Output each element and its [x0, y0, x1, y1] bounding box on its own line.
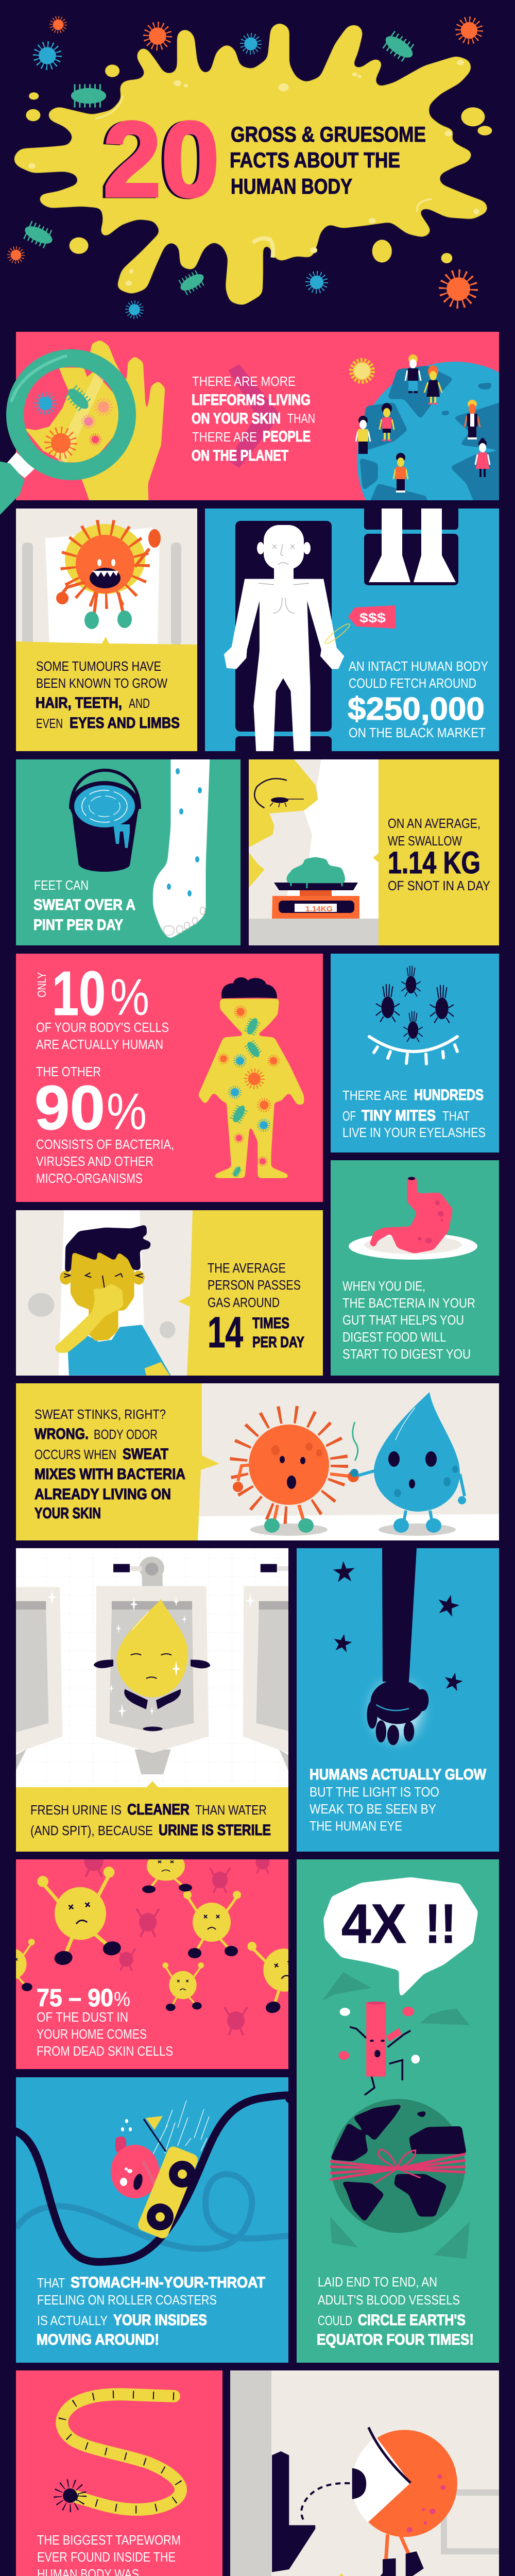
- text: roller coaster: STOMACH-IN-YOUR-THROAT: [71, 2274, 265, 2291]
- text: mites: HUNDREDS: [414, 1087, 484, 1104]
- text: snot: [388, 816, 490, 893]
- panel: tumours: [16, 509, 197, 751]
- text: tumours: SOME TUMOURS HAVE: [36, 658, 161, 674]
- icon: figure covered in germs: [198, 977, 304, 1178]
- panel: eye crust: [230, 2370, 499, 2576]
- text: vessels: ADULT'S BLOOD VESSELS: [318, 2292, 460, 2308]
- text: mites: THAT: [442, 1108, 470, 1124]
- yellow text block: [178, 1210, 323, 1376]
- icon: bucket: [70, 770, 140, 872]
- panel: urine: [16, 1548, 288, 1852]
- wall frame: [444, 2493, 499, 2551]
- icon: man holding nose: [28, 1210, 176, 1376]
- text: lifeforms: ON YOUR SKIN: [192, 410, 281, 427]
- icon: foot with sweat drops: [153, 742, 210, 939]
- text: dust: [37, 1985, 173, 2059]
- panel: blood vessels: [297, 1859, 499, 2363]
- icon: face profile: [249, 757, 321, 919]
- icon: closed eye with lashes: [369, 1037, 457, 1064]
- icon: globe tied with ribbon: [330, 2099, 467, 2233]
- person 1: [405, 354, 421, 393]
- icon: magnifying glass: [0, 355, 127, 515]
- text: gut: WHEN YOU DIE,: [342, 1278, 425, 1294]
- text: vessels: LAID END TO END, AN: [318, 2274, 437, 2290]
- text: feet: SWEAT OVER A: [33, 896, 135, 913]
- icon: stomach: [370, 1177, 453, 1253]
- speech bubble 4X: [323, 1877, 478, 1998]
- text: percentages: 10: [52, 958, 106, 1028]
- text: percentages: VIRUSES AND OTHER: [36, 1154, 153, 1169]
- globe continents: [359, 366, 506, 507]
- panel: sweaty feet: [16, 759, 241, 945]
- icon: sun: [352, 361, 372, 381]
- icon: stars: [332, 1561, 464, 1692]
- yellow text block: [373, 759, 499, 945]
- text: tumours: HAIR, TEETH,: [36, 694, 122, 711]
- icon: operating room background: [22, 528, 181, 646]
- text: glow: BUT THE LIGHT IS TOO: [310, 1784, 439, 1800]
- text: sweat: WRONG.: [35, 1426, 89, 1443]
- text: roller coaster: FEELING ON ROLLER COASTERS: [37, 2292, 217, 2308]
- panel: swallowing snot: [249, 759, 499, 945]
- icon: price tag: $$$: [359, 610, 386, 625]
- text: mites: THERE ARE: [342, 1088, 407, 1103]
- panel: gut bacteria: [331, 1160, 499, 1376]
- text: roller coaster: [37, 2274, 265, 2348]
- text: feet: [33, 877, 135, 934]
- title: [103, 100, 426, 219]
- text: urine: (AND SPIT), BECAUSE: [30, 1823, 153, 1838]
- text: dust: 75 – 90: [37, 1985, 113, 2012]
- text: tumours: [36, 658, 180, 732]
- icon: urinals: [16, 1556, 288, 1774]
- text: lifeforms: THERE ARE MORE: [192, 374, 296, 389]
- text: tapeworm: [37, 2532, 181, 2576]
- yellow text block: [16, 1383, 219, 1540]
- text: sweat: [35, 1406, 185, 1522]
- panel: sweat and bacteria: [16, 1383, 499, 1540]
- text: roller coaster: YOUR INSIDES: [113, 2312, 207, 2329]
- splat shape: [13, 23, 492, 306]
- text: gas: TIMES: [252, 1315, 289, 1332]
- text: percentages: CONSISTS OF BACTERIA,: [36, 1137, 174, 1152]
- text: vessels: [317, 2274, 474, 2348]
- icon: yellow hand: [53, 340, 165, 505]
- person 3: [380, 403, 394, 441]
- text: roller coaster: MOVING AROUND!: [37, 2331, 159, 2348]
- text: roller coaster: THAT: [37, 2275, 65, 2291]
- yellow text block: [230, 2573, 499, 2576]
- speech bubble 4X: !!: [425, 1892, 456, 1955]
- text: percentages: MICRO-ORGANISMS: [36, 1171, 143, 1186]
- magnifier handle: [0, 452, 35, 515]
- text: urine: FRESH URINE IS: [30, 1802, 122, 1818]
- text: vessels: EQUATOR FOUR TIMES!: [317, 2331, 474, 2348]
- text: vessels: CIRCLE EARTH'S: [358, 2312, 466, 2329]
- text: dust: %: [114, 1988, 130, 2011]
- table top: [249, 919, 379, 945]
- icon: yellow skin cells: [0, 1842, 324, 2015]
- text: percentages: %: [110, 969, 149, 1026]
- icon: orange bacteria character: [233, 1414, 359, 1533]
- text: urine: CLEANER: [127, 1801, 190, 1818]
- header: slime splat: [9, 18, 492, 317]
- yellow caption: [16, 637, 197, 751]
- text: sweat: ALREADY LIVING ON: [35, 1486, 171, 1503]
- text: sweat: OCCURS WHEN: [35, 1447, 116, 1462]
- text: gut: THE BACTERIA IN YOUR: [342, 1295, 475, 1311]
- text: gas: GAS AROUND: [208, 1295, 280, 1310]
- text: feet: PINT PER DAY: [33, 917, 123, 934]
- text: roller coaster: IS ACTUALLY: [37, 2313, 108, 2328]
- text: black market: [348, 658, 488, 740]
- icon: white body: [224, 525, 344, 754]
- text: percentages: [35, 958, 174, 1186]
- text: glow: THE HUMAN EYE: [310, 1818, 402, 1834]
- text: feet: FEET CAN: [34, 877, 89, 893]
- icon: dark arm and hand: [367, 1548, 428, 1745]
- text: percentages: THE OTHER: [36, 1064, 101, 1079]
- title words: GROSS & GRUESOME: [231, 122, 426, 146]
- text: percentages: 90: [35, 1073, 105, 1143]
- text: dust: YOUR HOME COMES: [37, 2026, 147, 2042]
- text: gas: PER DAY: [252, 1334, 304, 1351]
- text: gas: THE AVERAGE: [208, 1260, 286, 1276]
- text: gut: START TO DIGEST YOU: [342, 1346, 471, 1362]
- faded track: [16, 2174, 288, 2249]
- person 4: [356, 416, 370, 454]
- title words: FACTS ABOUT THE: [230, 148, 400, 172]
- faded shapes: [322, 1972, 470, 2259]
- text: gas: [208, 1260, 304, 1357]
- text: percentages: ONLY: [35, 972, 48, 997]
- text: snot: ON AN AVERAGE,: [388, 816, 480, 831]
- icon: stomach in cart: [111, 2116, 200, 2240]
- text: dust: FROM DEAD SKIN CELLS: [37, 2043, 173, 2059]
- speech bubble 4X: 4X: [341, 1892, 406, 1955]
- text: gut: [342, 1278, 475, 1362]
- text: lifeforms: THAN: [287, 411, 315, 426]
- text: mites: TINY MITES: [362, 1107, 436, 1124]
- hand glow: [358, 1667, 435, 1754]
- person 7: [393, 453, 408, 493]
- icon: stink line: [353, 1422, 358, 1461]
- icon: plate: [349, 1233, 477, 1260]
- text: gut: DIGEST FOOD WILL: [342, 1329, 446, 1345]
- text: tumours: EYES AND LIMBS: [70, 715, 180, 732]
- text: gut: GUT THAT HELPS YOU: [342, 1312, 464, 1328]
- lens ring: [11, 355, 127, 471]
- text: urine: [30, 1801, 271, 1839]
- text: mites: [342, 1087, 486, 1140]
- shadows: [250, 1523, 456, 1536]
- germs around splat: [9, 18, 480, 317]
- icon: tapeworm: [58, 2394, 181, 2510]
- text: tumours: BEEN KNOWN TO GROW: [36, 675, 167, 691]
- text: lifeforms: PEOPLE: [263, 428, 311, 445]
- person 5: [465, 400, 480, 439]
- text: tapeworm: THE BIGGEST TAPEWORM: [37, 2532, 181, 2548]
- text: lifeforms: LIFEFORMS LIVING: [192, 392, 311, 409]
- text: snot: WE SWALLOW: [388, 833, 462, 849]
- panel: body cells percentages: [16, 954, 323, 1202]
- text: sweat: BODY ODOR: [94, 1427, 158, 1442]
- icon: orange tumour character: [56, 524, 161, 629]
- text: vessels: COULD: [318, 2313, 352, 2328]
- icon: feet: [369, 505, 456, 582]
- text: lifeforms: ON THE PLANET: [192, 447, 288, 464]
- text: black market: $250,000: [348, 691, 485, 727]
- icon: sparkles: [47, 1589, 255, 1718]
- text: glow: [310, 1766, 487, 1834]
- icon: yellow urine drop character: [94, 1599, 210, 1709]
- text: mites: OF: [342, 1108, 356, 1124]
- text: percentages: %: [107, 1083, 147, 1141]
- icon: price tag: [323, 605, 396, 646]
- person 6: [475, 438, 490, 477]
- text: percentages: ARE ACTUALLY HUMAN: [36, 1037, 163, 1052]
- panel: roller coaster: [16, 2077, 288, 2363]
- text: sweat: MIXES WITH BACTERIA: [35, 1466, 185, 1483]
- continents: [330, 2104, 467, 2222]
- icon: mites: [376, 966, 454, 1042]
- text: sweat: SWEAT: [123, 1446, 168, 1463]
- text: gas: 14: [208, 1308, 243, 1357]
- text: tapeworm: EVER FOUND INSIDE THE: [37, 2549, 176, 2565]
- title words: HUMAN BODY: [231, 174, 352, 198]
- icon: blood vessel character: [339, 2002, 420, 2095]
- panel: humans glow: [297, 1548, 499, 1852]
- text: lifeforms: THERE ARE: [192, 429, 257, 445]
- text: tumours: AND: [129, 696, 150, 711]
- icon: blue sweat drop character: [350, 1392, 466, 1533]
- text: urine: THAN WATER: [195, 1802, 267, 1818]
- person 2: [424, 365, 442, 404]
- icon: scale with snot: 1.14KG: [305, 905, 333, 913]
- text: lifeforms: [192, 374, 315, 464]
- title number: 20: [103, 100, 219, 219]
- yellow caption: [16, 1781, 288, 1852]
- panel: dust and dead skin: [16, 1859, 288, 2069]
- icon: bug in nostril: [270, 798, 304, 807]
- text: dust: OF THE DUST IN: [37, 2009, 128, 2025]
- dark track: [13, 2095, 291, 2262]
- icon: eye character peeing: [272, 2427, 457, 2576]
- icon: faded skin cells: [81, 1846, 272, 2035]
- text: glow: WEAK TO BE SEEN BY: [310, 1801, 436, 1817]
- panel: lifeforms on skin: [16, 332, 499, 500]
- panel: passing gas: [16, 1210, 323, 1376]
- icon: globe with people: [352, 354, 515, 557]
- icon: speed lines: [146, 2100, 209, 2169]
- panel: eyelash mites: [331, 954, 499, 1153]
- title words: [230, 122, 426, 198]
- icon: dark table: [235, 505, 458, 757]
- panel: tapeworm: [16, 2370, 222, 2576]
- icon: chevron behind text: [228, 364, 281, 468]
- panel: body on black market: [205, 509, 499, 751]
- text: sweat: YOUR SKIN: [35, 1505, 101, 1522]
- lens view with germs: [22, 365, 122, 466]
- icon: scale with snot: [272, 857, 359, 919]
- ribbon: [330, 2149, 466, 2183]
- text: sweat: SWEAT STINKS, RIGHT?: [35, 1406, 166, 1422]
- text: gas: PERSON PASSES: [208, 1277, 301, 1293]
- text: tumours: EVEN: [36, 716, 63, 731]
- text: percentages: OF YOUR BODY'S CELLS: [36, 1020, 169, 1035]
